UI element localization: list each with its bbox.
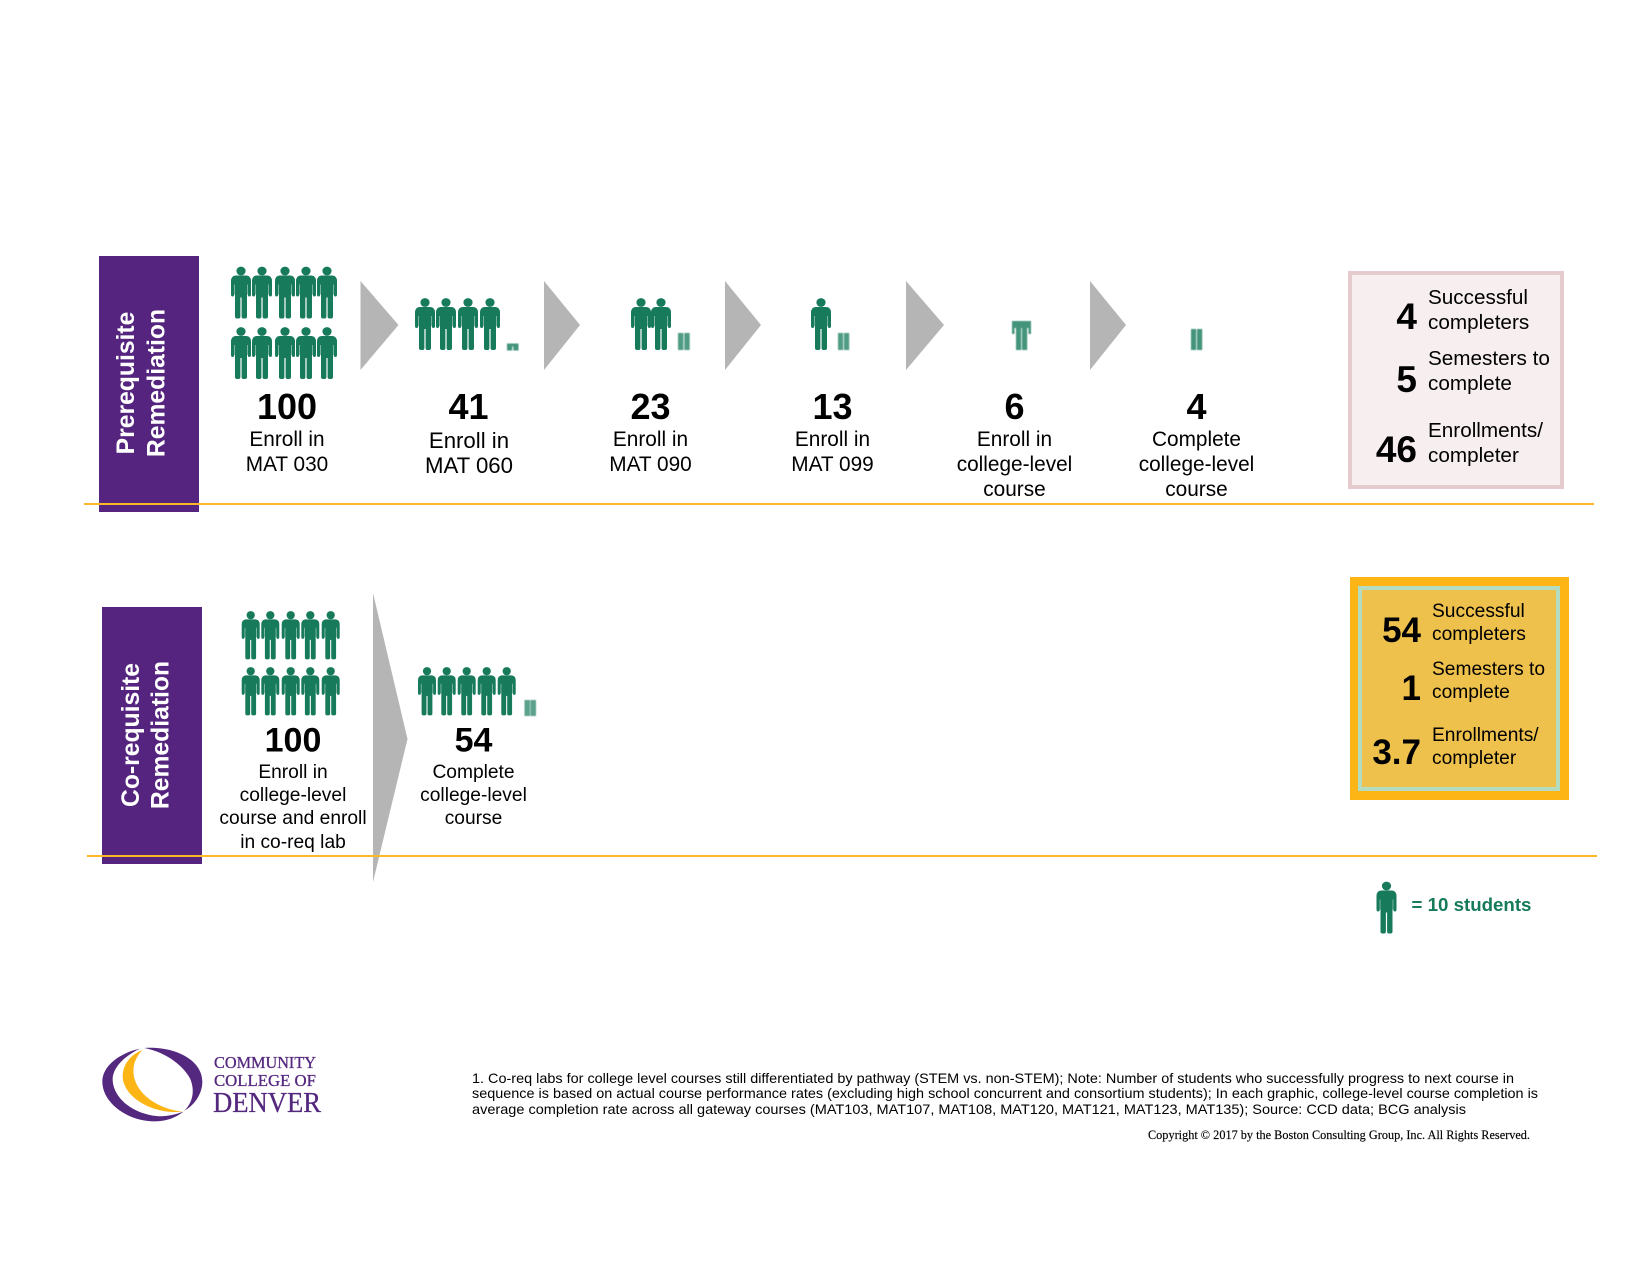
- number: 6: 6: [1004, 386, 1025, 427]
- stat: 4 successful completers: Successful: [1428, 286, 1528, 309]
- stat: 46 enrollments per completer: [1376, 419, 1543, 470]
- label: enroll in MAT 060: [425, 428, 513, 478]
- label: enroll in MAT 060: Enroll in: [429, 428, 509, 453]
- stat: 1 semester to complete: Semesters to: [1432, 659, 1545, 680]
- panel: co-requisite remediation label: Co-requisite: [118, 663, 145, 807]
- label: enroll in MAT 060: MAT 060: [425, 453, 513, 478]
- copyright: Copyright © 2017 by the Boston Consulting Group, Inc. All Rights Reserved.: [1148, 1128, 1530, 1142]
- icon group: 100 students: [231, 267, 337, 379]
- label: enroll in college-level course: course: [983, 478, 1046, 501]
- stat: 46 enrollments per completer: Enrollments/: [1428, 419, 1543, 442]
- icon group: 100 students: [242, 611, 340, 715]
- label: enroll in college-level course and enroll in co-req lab: [219, 762, 367, 853]
- stat: 54 successful completers: [1382, 601, 1526, 650]
- panel: co-requisite remediation label: [102, 607, 202, 864]
- stat: 3.7 enrollments per completer: 3.7: [1372, 733, 1421, 772]
- icon: 6 students partial figure: [1012, 321, 1031, 350]
- stat: 5 semesters to complete: complete: [1428, 372, 1512, 395]
- stat: 3.7 enrollments per completer: completer: [1432, 748, 1517, 769]
- icon group: 54 students: [418, 667, 536, 716]
- label: enroll in MAT 099: Enroll in: [795, 428, 870, 451]
- stat: 1 semester to complete: 1: [1402, 669, 1421, 708]
- column: 23 enroll in MAT 090: [609, 298, 692, 476]
- label: enroll in college-level course: Enroll in: [977, 428, 1052, 451]
- arrow: co-requisite step: [373, 593, 408, 882]
- panel: co-requisite outcomes: [1350, 577, 1569, 800]
- stat: 54 successful completers: Successful: [1432, 601, 1525, 622]
- label: enroll in college-level course: [957, 428, 1072, 501]
- footnote: [472, 1071, 1538, 1117]
- stat: 5 semesters to complete: 5: [1396, 359, 1417, 400]
- panel: prerequisite remediation label: [99, 256, 199, 512]
- panel: co-requisite remediation label: Remediation: [148, 661, 174, 809]
- stat: 4 successful completers: 4: [1396, 296, 1417, 337]
- number: 100: 100: [265, 722, 321, 760]
- icon: 4 students partial figure: [1191, 329, 1202, 350]
- stat: 46 enrollments per completer: completer: [1428, 444, 1519, 467]
- arrow: step 1 to 2: [360, 281, 398, 370]
- stat: 3.7 enrollments per completer: Enrollments/: [1432, 725, 1539, 746]
- number: 13: 13: [812, 386, 853, 427]
- icon group: 13 students: [811, 298, 849, 350]
- stat: 46 enrollments per completer: 46: [1376, 429, 1417, 470]
- label: complete college-level course: Complete: [1152, 428, 1241, 451]
- number: 41: 41: [448, 386, 489, 427]
- icon group: 41 students: [415, 298, 518, 350]
- label: complete college-level course: course: [1165, 478, 1228, 501]
- column: 100 enroll in MAT 030: [231, 267, 337, 476]
- label: enroll in MAT 099: MAT 099: [791, 453, 874, 476]
- logo: Community College of Denver: COLLEGE OF: [214, 1071, 316, 1090]
- logo: Community College of Denver: DENVER: [213, 1088, 321, 1119]
- label: enroll in college-level course and enroll in co-req lab: Enroll in: [258, 762, 328, 783]
- label: enroll in MAT 030: [246, 428, 328, 476]
- arrow: step 5 to 6: [1090, 281, 1126, 370]
- label: enroll in college-level course and enroll in co-req lab: in co-req lab: [240, 832, 346, 853]
- label: enroll in college-level course: college-level: [957, 453, 1072, 476]
- label: enroll in MAT 030: Enroll in: [249, 428, 325, 451]
- stat: 4 successful completers: [1396, 286, 1529, 337]
- footnote: 1. Co-req labs for college level courses still differentiated by pathway (STEM vs. non-STEM); Note: Number of students who successfully progress to next course in: [472, 1071, 1514, 1086]
- stat: 3.7 enrollments per completer: [1372, 725, 1539, 772]
- legend: one icon equals 10 students: = 10 students: [1412, 894, 1531, 915]
- column: 13 enroll in MAT 099: [791, 298, 874, 476]
- label: complete college-level course: course: [445, 808, 502, 829]
- legend: one icon equals 10 students: [1376, 882, 1531, 934]
- divider line: prerequisite section: [84, 503, 1594, 505]
- label: enroll in college-level course and enroll in co-req lab: course and enroll: [219, 808, 367, 829]
- footnote: sequence is based on actual course performance rates (excluding high school concurrent and consortium students); In each graphic, college-level course completion is: [472, 1086, 1538, 1101]
- label: complete college-level course: college-level: [1139, 453, 1254, 476]
- stat: 1 semester to complete: complete: [1432, 682, 1510, 703]
- arrow: step 2 to 3: [544, 281, 580, 370]
- number: 54: 54: [455, 722, 492, 760]
- number: 100: 100: [257, 386, 317, 427]
- stat: 54 successful completers: 54: [1382, 611, 1422, 650]
- divider line: co-requisite section: [87, 855, 1597, 857]
- logo: Community College of Denver: COMMUNITY: [214, 1053, 316, 1072]
- logo: Community College of Denver: [102, 1048, 321, 1121]
- column: 100 enroll in college-level course and co-req lab: [219, 611, 367, 853]
- label: complete college-level course: [1139, 428, 1254, 501]
- label: enroll in MAT 030: MAT 030: [246, 453, 328, 476]
- label: enroll in MAT 090: Enroll in: [613, 428, 688, 451]
- label: enroll in college-level course and enroll in co-req lab: college-level: [240, 785, 346, 806]
- stat: 5 semesters to complete: [1396, 347, 1550, 400]
- footnote: average completion rate across all gateway courses (MAT103, MAT107, MAT108, MAT120, MAT121, MAT123, MAT135); Source: CCD data; BCG analysis: [472, 1102, 1466, 1117]
- stat: 5 semesters to complete: Semesters to: [1428, 347, 1550, 370]
- column: 6 enroll in college-level course: [957, 321, 1072, 501]
- label: complete college-level course: college-level: [420, 785, 527, 806]
- column: 54 complete college-level course: [418, 667, 536, 829]
- column: 4 complete college-level course: [1139, 329, 1254, 501]
- column: 41 enroll in MAT 060: [415, 298, 518, 478]
- label: complete college-level course: Complete: [432, 762, 515, 783]
- stat: 54 successful completers: completers: [1432, 624, 1526, 645]
- label: enroll in MAT 090: [609, 428, 692, 476]
- arrow: step 3 to 4: [725, 281, 761, 370]
- panel: prerequisite remediation label: Prerequisite: [113, 312, 140, 454]
- label: enroll in MAT 090: MAT 090: [609, 453, 692, 476]
- panel: prerequisite remediation label: Remediation: [144, 309, 170, 457]
- number: 23: 23: [630, 386, 671, 427]
- panel: prerequisite outcomes: [1350, 273, 1562, 487]
- label: complete college-level course: [420, 762, 527, 829]
- stat: 4 successful completers: completers: [1428, 311, 1529, 334]
- arrow: step 4 to 5: [906, 281, 944, 370]
- label: enroll in MAT 099: [791, 428, 874, 476]
- stat: 1 semester to complete: [1402, 659, 1545, 708]
- number: 4: 4: [1186, 386, 1207, 427]
- icon group: 23 students: [631, 298, 690, 350]
